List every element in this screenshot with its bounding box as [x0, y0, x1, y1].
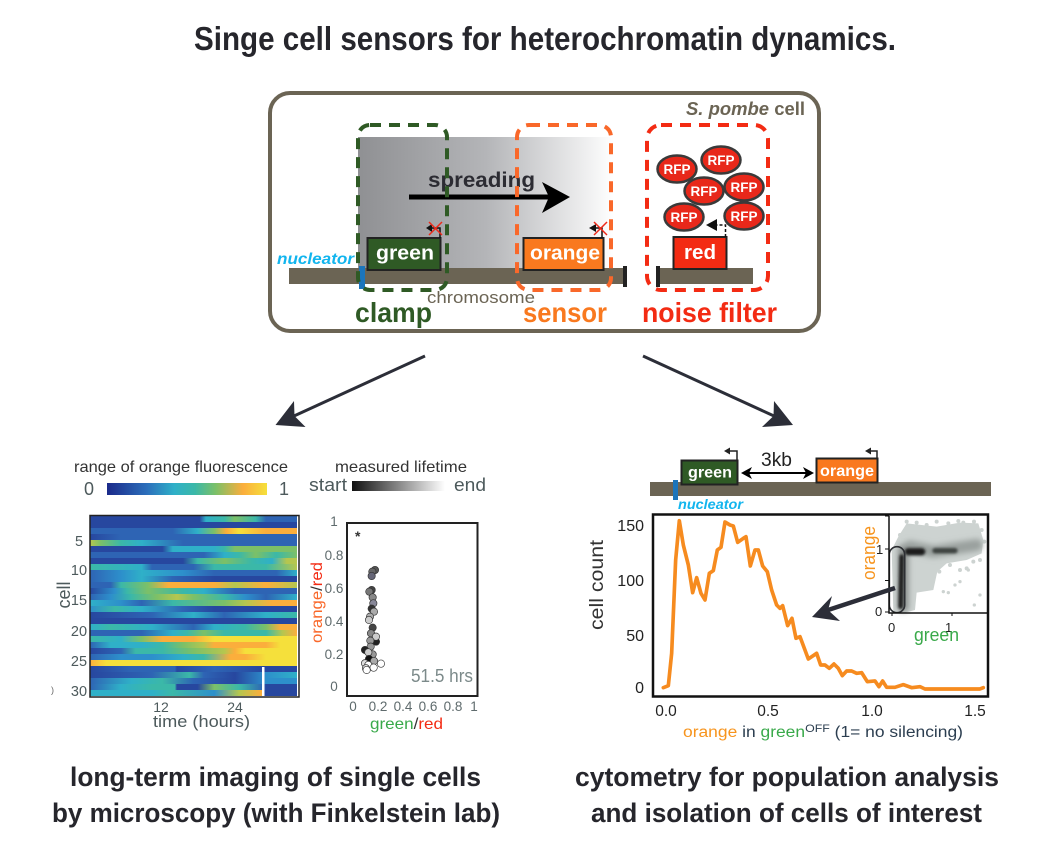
sensor dashed frame [517, 125, 611, 290]
inset density scatter: orange vs green: 1 [876, 542, 883, 557]
clamp label: clamp [355, 297, 432, 328]
histogram: cell count: orange in green [683, 724, 800, 741]
inset density scatter: orange vs green: 0 [888, 620, 895, 635]
scatter plot: orange/red vs green/red: 0 [330, 679, 338, 694]
arrow: from gated population to histogram [812, 588, 895, 621]
histogram: cell count: OFF [805, 723, 830, 735]
spreading arrow [409, 182, 570, 213]
scatter plot: orange/red vs green/red: 0.8 [325, 548, 343, 563]
title: Singe cell sensors for heterochromatin dynamics. [194, 20, 896, 57]
RFP proteins: RFP [708, 153, 734, 168]
colorbar legend: orange fluorescence: 0 [84, 479, 94, 499]
arrow: to cytometry [643, 356, 793, 427]
histogram: cell count: 0.0 [655, 703, 677, 720]
histogram: cell count: 0 [635, 680, 644, 697]
heatmap frame and axes: 12 [153, 699, 169, 715]
scatter plot: orange/red vs green/red: 1 [330, 514, 338, 529]
caption: microscopy: long-term imaging of single cells [70, 762, 481, 792]
spreading gradient [358, 137, 614, 268]
scatter plot: orange/red vs green/red: 0.4 [325, 614, 344, 629]
orange gene box [524, 238, 604, 270]
RFP proteins: RFP [730, 180, 758, 195]
green gene box: green [376, 242, 434, 264]
colorbar legend: orange fluorescence [74, 459, 289, 499]
scatter plot: orange/red vs green/red: green/red [370, 716, 443, 733]
histogram: cell count: 1.0 [861, 703, 883, 720]
heatmap frame and axes: 10 [71, 563, 87, 579]
active promoter: red [706, 219, 726, 237]
scatter plot: orange/red vs green/red: 0.8 [444, 699, 462, 714]
construct diagram: green and orange 3kb apart: 3kb [761, 450, 792, 471]
heatmap frame and axes: 30 [71, 684, 87, 700]
scatter plot: orange/red vs green/red: 0.2 [325, 647, 343, 662]
scatter plot: orange/red vs green/red: 0 [349, 699, 357, 714]
silenced promoter: orange [589, 222, 607, 238]
inset density scatter: orange vs green: orange [859, 526, 879, 580]
nucleator mark [359, 266, 365, 289]
heatmap frame and axes [51, 516, 299, 731]
noise filter dashed frame [647, 125, 768, 290]
RFP proteins: RFP [664, 162, 690, 177]
scatter plot: orange/red vs green/red: * [355, 528, 361, 544]
scatter plot: orange/red vs green/red: 0.6 [325, 581, 343, 596]
scatter plot: orange/red vs green/red: 1 [470, 699, 478, 714]
arrow: to microscopy [276, 356, 425, 427]
construct diagram: green and orange 3kb apart: nucleator [678, 496, 745, 512]
lifetime legend [309, 459, 486, 495]
heatmap frame and axes: 20 [71, 624, 87, 640]
histogram: cell count: cell count [587, 539, 608, 630]
nucleator label: nucleator [277, 251, 355, 268]
clamp dashed frame [358, 125, 447, 290]
lifetime legend: start [309, 475, 347, 495]
heatmap frame and axes: 5 [75, 534, 83, 550]
heatmap frame and axes: 15 [71, 593, 87, 609]
scatter plot: orange/red vs green/red: orange/red [309, 562, 326, 643]
scatter plot: orange/red vs green/red: 0.2 [369, 699, 387, 714]
construct diagram: green and orange 3kb apart [650, 448, 991, 512]
chromosome label: chromosome [427, 288, 535, 307]
red gene box [674, 237, 726, 269]
caption: microscopy: by microscopy (with Finkelstein lab) [52, 798, 500, 828]
histogram: cell count: 50 [626, 628, 644, 645]
inset density scatter: orange vs green: 0 [875, 604, 882, 619]
silenced promoter: green [426, 222, 442, 238]
histogram: cell count: 100 [617, 573, 644, 590]
heatmap frame and axes: 25 [71, 654, 87, 670]
caption: cytometry [575, 762, 999, 828]
RFP proteins: RFP [670, 210, 698, 225]
inset density scatter: orange vs green: green [914, 625, 959, 645]
orange gene box: orange [530, 242, 600, 264]
scatter plot: orange/red vs green/red: 0.6 [419, 699, 437, 714]
caption: cytometry: cytometry for population analysis [575, 762, 999, 792]
histogram: cell count: 0.5 [757, 703, 779, 720]
RFP proteins: RFP [690, 184, 718, 199]
histogram: cell count [587, 514, 988, 741]
red gene box: red [684, 242, 716, 264]
colorbar legend: orange fluorescence: 1 [279, 479, 289, 499]
chromosome right [658, 268, 753, 284]
chromosome end caps [623, 266, 660, 287]
colorbar legend: orange fluorescence: range of orange fluorescence [74, 459, 288, 476]
panel: S. pombe cell [270, 93, 819, 331]
scatter plot: orange/red vs green/red: 51.5 hrs [411, 666, 473, 686]
spreading label: spreading [428, 169, 535, 192]
heatmap frame and axes: cell [54, 581, 74, 609]
caption: microscopy [52, 762, 500, 828]
green gene box [368, 238, 440, 270]
RFP proteins: RFP [730, 209, 758, 224]
noise filter label: noise filter [642, 297, 777, 328]
heatmap frame and axes: ) [51, 685, 54, 695]
sensor label: sensor [523, 297, 607, 328]
cell label: S. pombe cell [686, 99, 805, 119]
heatmap frame and axes: 24 [227, 699, 243, 715]
construct diagram: green and orange 3kb apart: green [688, 464, 732, 482]
lifetime legend: measured lifetime [335, 459, 467, 476]
construct diagram: green and orange 3kb apart: orange [820, 463, 874, 480]
chromosome left [289, 268, 624, 284]
histogram: cell count: 150 [617, 518, 644, 535]
heatmap frame and axes: time (hours) [153, 712, 250, 731]
scatter plot: orange/red vs green/red [309, 514, 478, 733]
inset density scatter: orange vs green: 1 [945, 620, 952, 635]
lifetime legend: end [454, 475, 486, 495]
scatter plot: orange/red vs green/red: 0.4 [394, 699, 413, 714]
RFP proteins [658, 146, 764, 230]
inset density scatter: orange vs green [859, 516, 988, 645]
histogram: cell count: (1= no silencing) [830, 724, 963, 741]
histogram: cell count: 1.5 [964, 703, 986, 720]
heatmap: orange fluorescence per cell over time [90, 516, 297, 696]
caption: cytometry: and isolation of cells of interest [591, 798, 982, 828]
